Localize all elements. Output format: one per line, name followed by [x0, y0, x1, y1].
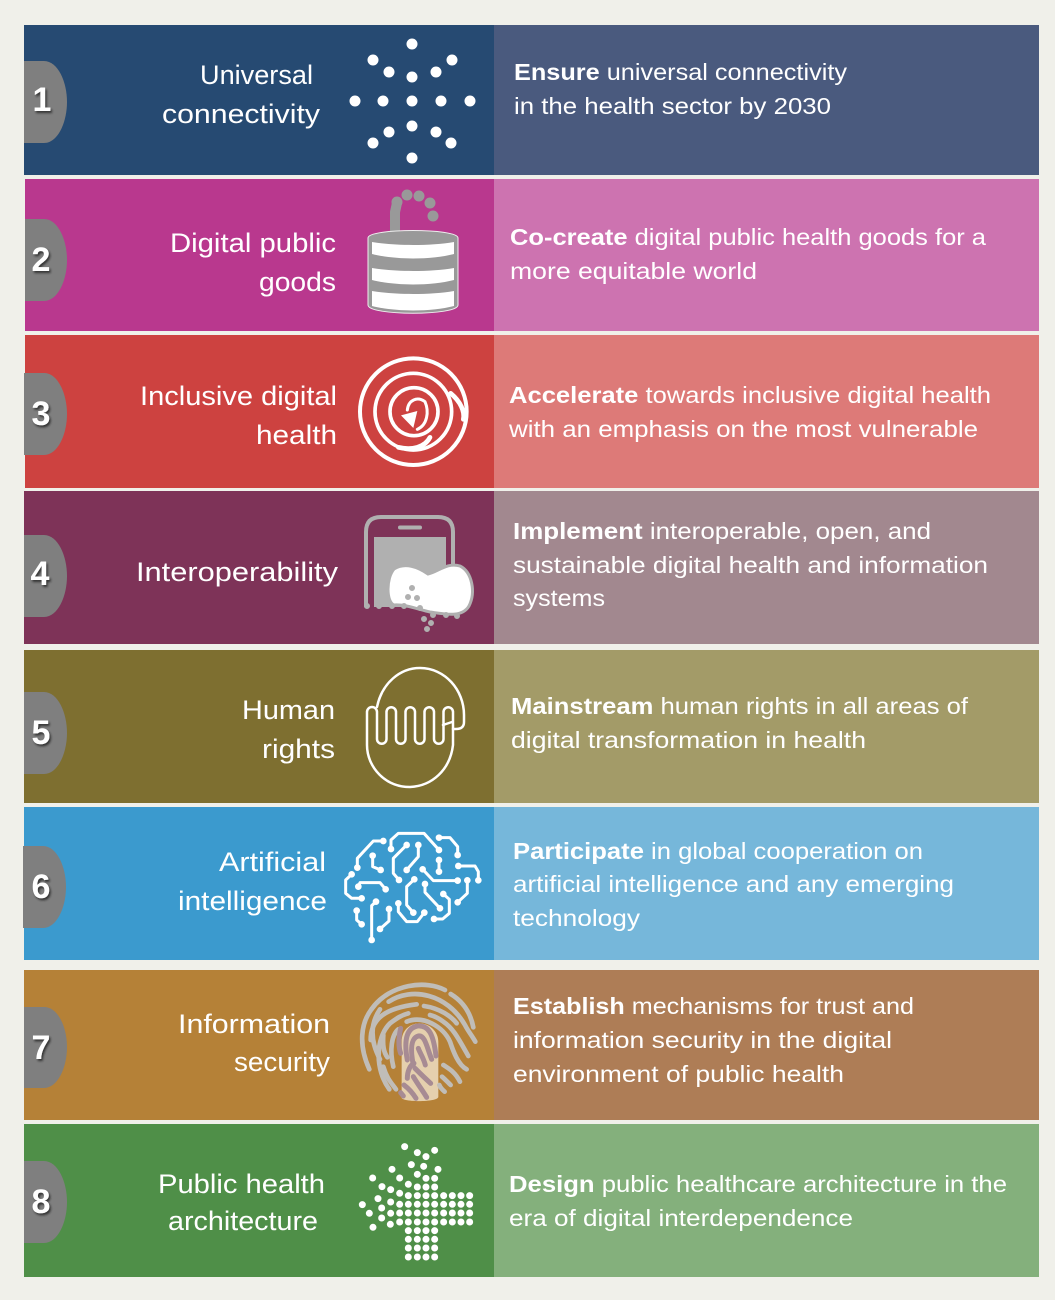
heading: digital public goods: Digital public [170, 228, 336, 258]
heading: information security: security [234, 1047, 331, 1077]
panel: row 1 universal connectivity [24, 25, 1039, 175]
number badge 4: 4 [31, 555, 50, 593]
panel: row 4 interoperability [24, 491, 1039, 644]
icon: head with meander line [367, 668, 464, 787]
panel: row 8 public health architecture [24, 1124, 1039, 1277]
heading: public health architecture: Public health [158, 1169, 325, 1199]
heading: artificial intelligence [178, 847, 327, 916]
panel: row 5 human rights [24, 650, 1039, 803]
heading: public health architecture: architecture [168, 1206, 318, 1236]
icon: circuit brain [346, 833, 478, 940]
text: goal 6: Participate in global cooperation on [513, 838, 923, 864]
number badge 4 [24, 535, 67, 617]
number badge 8: 8 [32, 1183, 50, 1221]
number badge 3: 3 [32, 395, 50, 433]
text: goal 8: Design public healthcare architecture in the [509, 1171, 1007, 1197]
heading: artificial intelligence: Artificial [219, 847, 326, 877]
text: goal 3: with an emphasis on the most vulnerable [508, 416, 978, 442]
number badge 1 [24, 61, 67, 143]
number badge 5 [24, 692, 67, 774]
text: goal 1 [514, 59, 847, 119]
number badge 7 [24, 1007, 67, 1088]
text: goal 4: Implement interoperable, open, and [513, 518, 931, 544]
text: goal 6 [513, 838, 954, 931]
panel: row 2 digital public goods [25, 179, 1039, 331]
heading: human rights: rights [262, 734, 335, 764]
icon: dotted medical cross [362, 1147, 470, 1257]
heading: universal connectivity: connectivity [162, 99, 321, 129]
number badge 6 [23, 846, 66, 928]
heading: inclusive digital health: health [256, 420, 337, 450]
number badge 6: 6 [32, 868, 50, 906]
heading: inclusive digital health [140, 381, 337, 450]
number badge 7: 7 [32, 1029, 50, 1067]
text: goal 8 [509, 1171, 1007, 1231]
icon: spiral arrow [360, 358, 467, 465]
text: goal 7: Establish mechanisms for trust and [513, 993, 914, 1019]
heading: information security [178, 1009, 331, 1077]
text: goal 7: environment of public health [513, 1061, 844, 1087]
text: goal 7: information security in the digital [513, 1027, 892, 1053]
text: goal 4: sustainable digital health and information [513, 552, 988, 578]
text: goal 1: Ensure universal connectivity [514, 59, 847, 85]
number badge 2 [25, 219, 67, 301]
heading: inclusive digital health: Inclusive digital [140, 381, 337, 411]
icon: fingerprint [362, 985, 475, 1101]
text: goal 3: Accelerate towards inclusive digital health [509, 382, 991, 408]
panel: row 3 inclusive digital health [24, 335, 1039, 488]
panel: row 6 artificial intelligence [23, 807, 1039, 960]
heading: human rights [242, 695, 335, 764]
text: goal 2: Co-create digital public health goods for a [510, 224, 987, 250]
number badge 8 [24, 1161, 67, 1243]
panel: row 7 information security [24, 970, 1039, 1120]
heading: digital public goods: goods [259, 267, 336, 297]
number badge 1: 1 [33, 81, 51, 119]
text: goal 5: Mainstream human rights in all areas of [511, 693, 969, 719]
text: goal 6: technology [513, 905, 640, 931]
heading: universal connectivity [162, 60, 321, 129]
text: goal 5: digital transformation in health [511, 727, 866, 753]
number badge 5: 5 [32, 714, 50, 752]
text: goal 2: more equitable world [510, 258, 757, 284]
heading: artificial intelligence: intelligence [178, 886, 327, 916]
text: goal 6: artificial intelligence and any emerging [513, 871, 954, 897]
heading: digital public goods [170, 228, 336, 297]
number badge 2: 2 [32, 241, 50, 279]
text: goal 3 [508, 382, 991, 442]
icon: database with dots [368, 195, 458, 313]
heading: interoperability: Interoperability [136, 557, 339, 587]
heading: human rights: Human [242, 695, 335, 725]
heading: public health architecture [158, 1169, 325, 1236]
heading: universal connectivity: Universal [200, 60, 313, 90]
icon: radiating dots [355, 44, 470, 158]
text: goal 2 [510, 224, 987, 284]
text: goal 5 [511, 693, 969, 753]
icon: phone with cloud [366, 517, 472, 629]
text: goal 7 [513, 993, 914, 1087]
text: goal 1: in the health sector by 2030 [514, 93, 831, 119]
number badge 3 [24, 373, 67, 455]
text: goal 4 [513, 518, 988, 611]
text: goal 4: systems [513, 585, 605, 611]
text: goal 8: era of digital interdependence [509, 1205, 853, 1231]
heading: information security: Information [178, 1009, 330, 1039]
